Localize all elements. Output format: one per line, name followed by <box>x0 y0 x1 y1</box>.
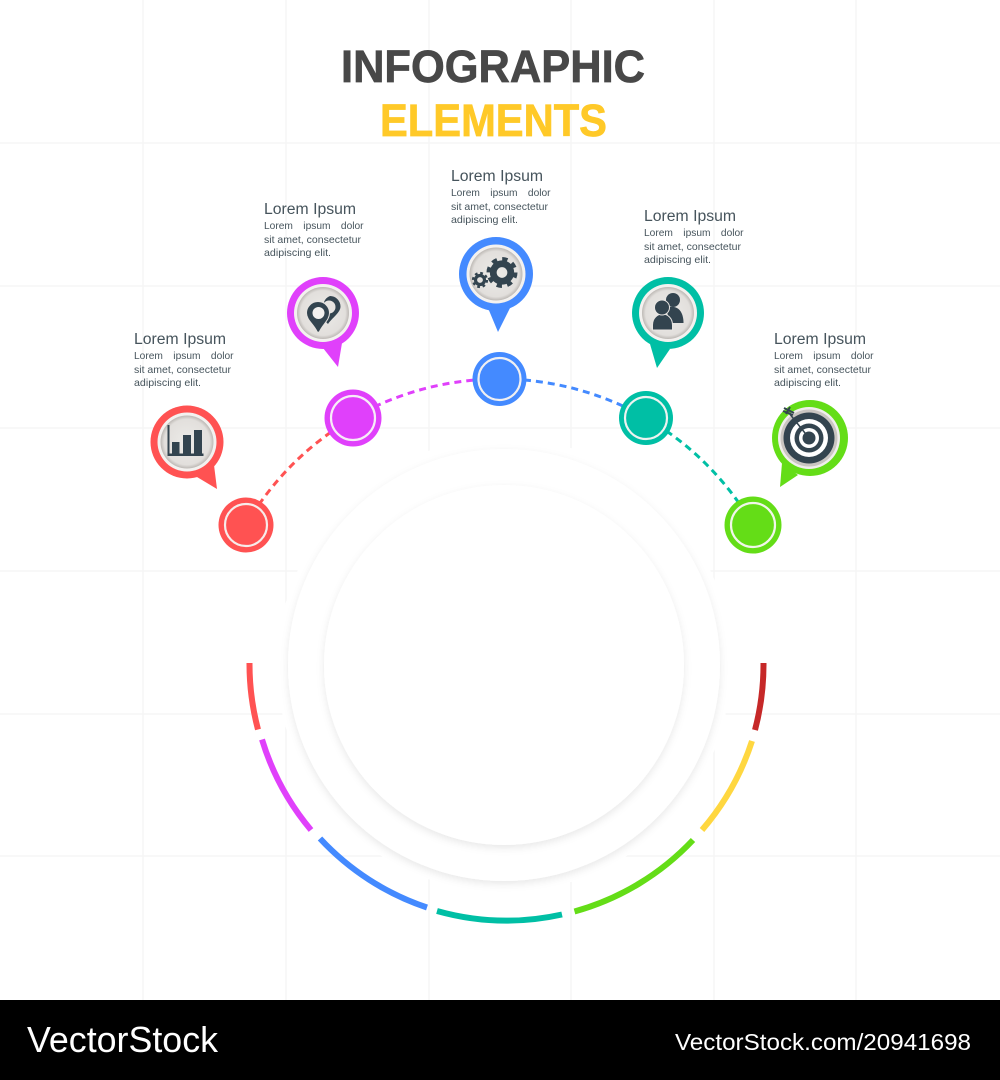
label: teal: Lorem Ipsum <box>644 208 736 225</box>
footer bar <box>0 1000 1000 1080</box>
label: magenta: adipiscing elit. <box>264 248 331 259</box>
footer url: VectorStock.com/20941698 <box>675 1029 971 1055</box>
label: blue: adipiscing elit. <box>451 215 518 226</box>
label: blue: sit amet, consectetur <box>451 202 549 213</box>
title: INFOGRAPHIC <box>341 41 645 92</box>
label: magenta: sit amet, consectetur <box>264 235 362 246</box>
label: teal: adipiscing elit. <box>644 255 711 266</box>
label: blue: Lorem ipsum dolor <box>451 188 551 199</box>
label: red: adipiscing elit. <box>134 378 201 389</box>
label: teal: Lorem ipsum dolor <box>644 228 744 239</box>
label: red <box>134 331 234 389</box>
label: red: sit amet, consectetur <box>134 365 232 376</box>
label: magenta: Lorem Ipsum <box>264 201 356 218</box>
icon: bar chart <box>168 425 204 456</box>
pin: red chart <box>150 406 224 489</box>
footer logo: VectorStock <box>27 1019 219 1060</box>
label: green: adipiscing elit. <box>774 378 841 389</box>
node: blue <box>472 352 526 406</box>
label: red: Lorem ipsum dolor <box>134 351 234 362</box>
icon: target <box>783 407 834 464</box>
label: teal <box>644 208 744 266</box>
outer neumorphic circle <box>288 449 720 881</box>
icon: map pins <box>306 296 340 332</box>
label: blue <box>451 168 551 226</box>
pin: teal people <box>632 277 704 368</box>
central circle mask <box>277 438 731 892</box>
node: red <box>218 498 274 552</box>
dashed connector arc <box>246 379 753 525</box>
icon: gears <box>473 259 516 287</box>
label: blue: Lorem Ipsum <box>451 168 543 185</box>
node: green <box>724 496 782 554</box>
label: red: Lorem Ipsum <box>134 331 226 348</box>
pin: magenta location <box>287 277 359 367</box>
node: magenta <box>324 390 382 446</box>
label: magenta: Lorem ipsum dolor <box>264 221 364 232</box>
segmented bottom arc <box>249 663 764 921</box>
label: green: sit amet, consectetur <box>774 365 872 376</box>
node: teal <box>619 391 673 445</box>
title: ELEMENTS <box>380 95 607 146</box>
pin: green target <box>772 400 848 487</box>
title <box>341 41 645 146</box>
label: green: Lorem ipsum dolor <box>774 351 874 362</box>
label: green <box>774 331 874 389</box>
inner neumorphic circle <box>324 485 684 845</box>
label: green: Lorem Ipsum <box>774 331 866 348</box>
label: magenta <box>264 201 364 259</box>
label: teal: sit amet, consectetur <box>644 242 742 253</box>
pin: blue gears <box>459 237 533 332</box>
icon: people <box>652 293 684 330</box>
